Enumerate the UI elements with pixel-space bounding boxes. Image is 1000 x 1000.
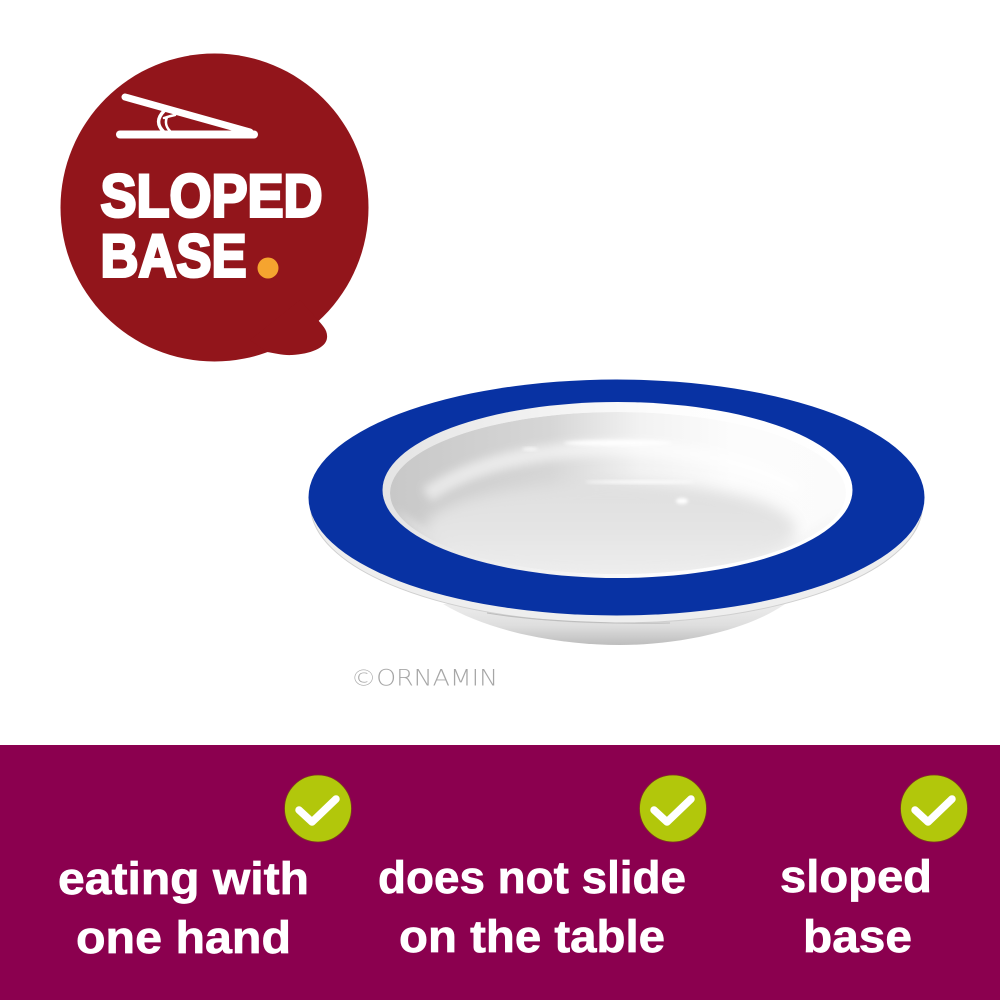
- icon: sloped base: [120, 97, 254, 134]
- benefit text: does not slide: [378, 852, 686, 903]
- badge: sloped base: [60, 54, 368, 362]
- blue rim: [308, 380, 924, 616]
- check icon: [640, 775, 706, 842]
- underside seam: [487, 613, 670, 623]
- check icon: [284, 775, 352, 842]
- copyright text: ©ORNAMIN: [351, 666, 498, 692]
- benefits band: [0, 745, 1000, 1000]
- orange dot: [258, 258, 278, 278]
- benefit text: [378, 852, 686, 962]
- plate illustration: [308, 380, 924, 645]
- benefit: sloped base: [780, 775, 968, 962]
- plate underside: [443, 602, 788, 645]
- badge heading line 2: BASE: [100, 222, 246, 290]
- benefit text: [58, 853, 309, 963]
- plate rim edge: [310, 387, 922, 623]
- benefit text: sloped: [780, 851, 932, 902]
- plate well: [390, 412, 808, 574]
- benefit: eating with one hand: [58, 775, 352, 963]
- badge background: [60, 54, 368, 362]
- plate well rim: [382, 402, 852, 578]
- benefit text: on the table: [399, 911, 665, 962]
- check icon: [900, 775, 968, 842]
- badge heading line 1: SLOPED: [100, 162, 322, 230]
- benefit: does not slide on the table: [378, 775, 706, 962]
- benefit text: [780, 851, 932, 962]
- benefit text: eating with: [58, 853, 309, 904]
- benefit text: base: [803, 911, 912, 962]
- benefit text: one hand: [76, 912, 291, 963]
